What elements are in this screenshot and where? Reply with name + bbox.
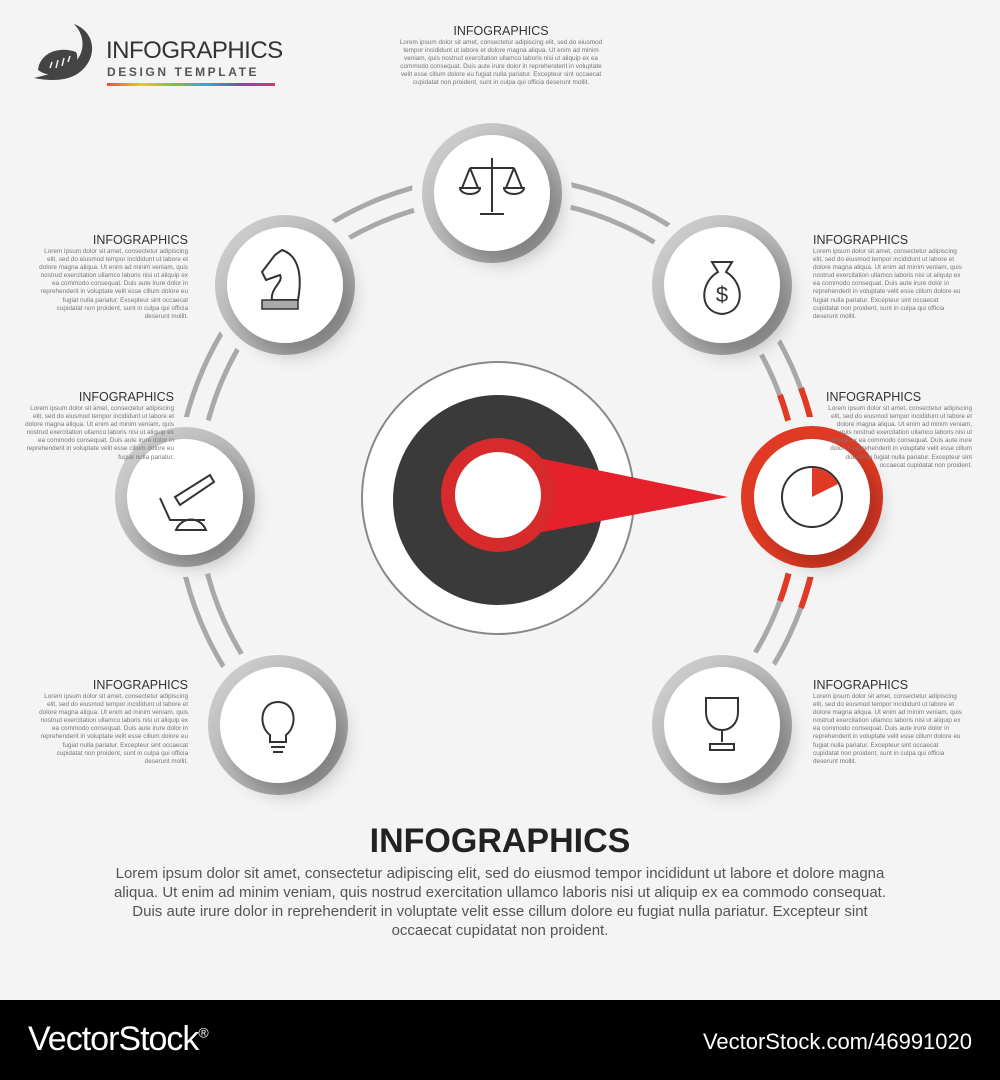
text: bottom-right: INFOGRAPHICS xyxy=(813,678,908,692)
text: bottom-left: INFOGRAPHICS xyxy=(93,678,188,692)
text: left: INFOGRAPHICS xyxy=(79,390,174,404)
text: right: Lorem ipsum dolor sit amet, consectetur adipiscing elit, sed do eiusmod tempor incididunt ut labore et dolore magna aliqua. Ut enim ad minim veniam, quis nostrud exercitation ullamco laboris nisi ut aliquip ex ea commodo consequat. Duis aute irure dolor in reprehenderit in voluptate velit esse cillum dolore eu fugiat nulla pariatur. Excepteur sint occaecat cupidatat non proident. xyxy=(828,405,972,469)
node: bottom-right trophy xyxy=(642,645,802,805)
text: top-left: Lorem ipsum dolor sit amet, consectetur adipiscing elit, sed do eiusmod tempor incididunt ut labore et dolore magna aliqua. Ut enim ad minim veniam, quis nostrud exercitation ullamco laboris nisi ut aliquip ex ea commodo consequat. Duis aute irure dolor in reprehenderit in voluptate velit esse cillum dolore eu fugiat nulla pariatur. Excepteur sint occaecat cupidatat non proident, sunt in culpa qui officia deserunt mollit. xyxy=(39,248,188,320)
node: top-right money: $ xyxy=(716,282,728,307)
logo xyxy=(34,24,283,86)
footer bar xyxy=(0,1000,1000,1080)
text: left: Lorem ipsum dolor sit amet, consectetur adipiscing elit, sed do eiusmod tempor incididunt ut labore et dolore magna aliqua. Ut enim ad minim veniam, quis nostrud exercitation ullamco laboris nisi ut aliquip ex ea commodo consequat. Duis aute irure dolor in reprehenderit in voluptate velit esse cillum dolore eu fugiat nulla pariatur. xyxy=(25,405,174,461)
node: top-right money xyxy=(642,205,802,365)
node: right clock (red) xyxy=(732,417,892,577)
main heading: INFOGRAPHICS xyxy=(370,822,630,860)
logo icon xyxy=(34,24,92,80)
node: top-left knight xyxy=(205,205,365,365)
text: bottom-left: Lorem ipsum dolor sit amet, consectetur adipiscing elit, sed do eiusmod tempor incididunt ut labore et dolore magna aliqua. Ut enim ad minim veniam, quis nostrud exercitation ullamco laboris nisi ut aliquip ex ea commodo consequat. Duis aute irure dolor in reprehenderit in voluptate velit esse cillum dolore eu fugiat nulla pariatur. Excepteur sint occaecat cupidatat non proident, sunt in culpa qui officia deserunt mollit. xyxy=(39,693,188,765)
text: bottom-right: Lorem ipsum dolor sit amet, consectetur adipiscing elit, sed do eiusmod tempor incididunt ut labore et dolore magna aliqua. Ut enim ad minim veniam, quis nostrud exercitation ullamco laboris nisi ut aliquip ex ea commodo consequat. Duis aute irure dolor in reprehenderit in voluptate velit esse cillum dolore eu fugiat nulla pariatur. Excepteur sint occaecat cupidatat non proident, sunt in culpa qui officia deserunt mollit. xyxy=(813,693,962,765)
logo: DESIGN TEMPLATE xyxy=(107,65,259,79)
node: left microscope xyxy=(105,417,265,577)
track xyxy=(176,176,820,745)
footer bar: VectorStock.com/46991020 xyxy=(703,1029,972,1054)
text: top-right: Lorem ipsum dolor sit amet, consectetur adipiscing elit, sed do eiusmod tempor incididunt ut labore et dolore magna aliqua. Ut enim ad minim veniam, quis nostrud exercitation ullamco laboris nisi ut aliquip ex ea commodo consequat. Duis aute irure dolor in reprehenderit in voluptate velit esse cillum dolore eu fugiat nulla pariatur. Excepteur sint occaecat cupidatat non proident, sunt in culpa qui officia deserunt mollit. xyxy=(813,248,962,320)
logo text: INFOGRAPHICS xyxy=(106,37,283,64)
text: top-right: INFOGRAPHICS xyxy=(813,233,908,247)
text: top: Lorem ipsum dolor sit amet, consectetur adipiscing elit, sed do eiusmod tempor incididunt ut labore et dolore magna aliqua. Ut enim ad minim veniam, quis nostrud exercitation ullamco laboris nisi ut aliquip ex ea commodo consequat. Duis aute irure dolor in reprehenderit in voluptate velit esse cillum dolore eu fugiat nulla pariatur. Excepteur sint occaecat cupidatat non proident, sunt in culpa qui officia deserunt mollit. xyxy=(400,39,602,86)
text: right: INFOGRAPHICS xyxy=(826,390,921,404)
node: bottom-left bulb xyxy=(198,645,358,805)
red track segment xyxy=(780,388,820,608)
text: top-left: INFOGRAPHICS xyxy=(93,233,188,247)
text: top: INFOGRAPHICS xyxy=(453,24,549,38)
main body text: Lorem ipsum dolor sit amet, consectetur adipiscing elit, sed do eiusmod tempor incididunt ut labore et dolore magna aliqua. Ut enim ad minim veniam, quis nostrud exercitation ullamco laboris nisi ut aliquip ex ea commodo consequat. Duis aute irure dolor in reprehenderit in voluptate velit esse cillum dolore eu fugiat nulla pariatur. Excepteur sint occaecat cupidatat non proident. xyxy=(114,865,886,939)
footer bar: VectorStock® xyxy=(28,1020,208,1058)
node: top balance xyxy=(412,113,572,273)
center circle xyxy=(362,362,728,634)
